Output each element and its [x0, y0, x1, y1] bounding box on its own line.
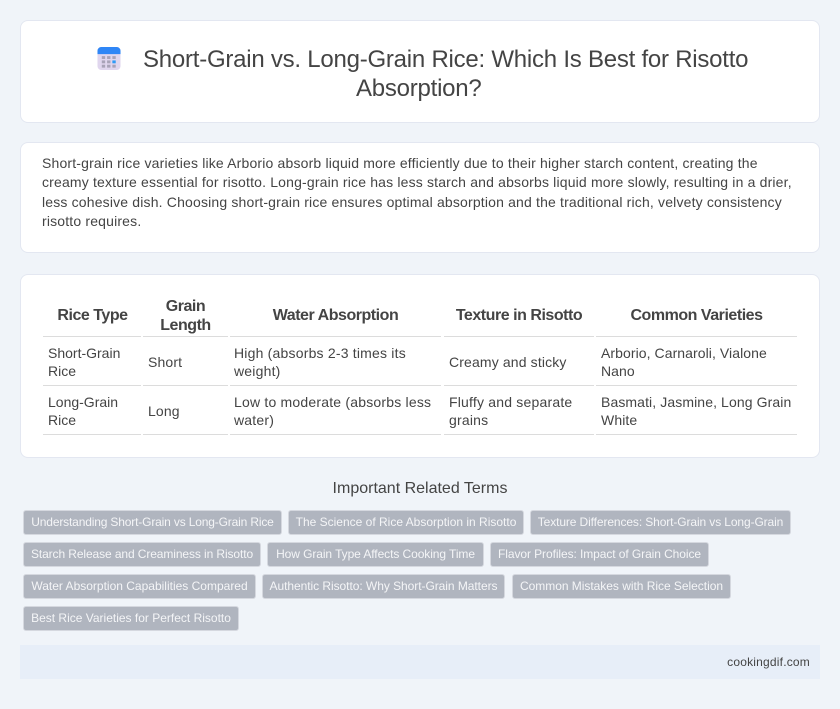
tag: Starch Release and Creaminess in Risotto [31, 547, 253, 561]
row: long-grain rice: White [601, 412, 637, 428]
tag [530, 510, 791, 535]
row: short-grain rice [48, 345, 767, 379]
row: long-grain rice: Long [148, 403, 180, 419]
related terms tags [23, 510, 791, 631]
tag [23, 606, 239, 631]
tag: Flavor Profiles: Impact of Grain Choice [498, 547, 701, 561]
table header: rice type: Rice Type [57, 307, 128, 324]
table header: common varieties: Common Varieties [630, 307, 763, 324]
tag: Texture Differences: Short-Grain vs Long-Grain [538, 515, 783, 529]
footer bar [20, 645, 820, 679]
intro text: risotto requires. [42, 213, 141, 229]
tag [490, 542, 709, 567]
row: short-grain rice: Arborio, Carnaroli, Vialone [601, 345, 767, 361]
tag [23, 510, 282, 535]
tag: Common Mistakes with Rice Selection [520, 579, 723, 593]
row: long-grain rice: water) [234, 412, 274, 428]
tag: Authentic Risotto: Why Short-Grain Matters [270, 579, 497, 593]
row: short-grain rice: Short [148, 354, 182, 370]
tag: Understanding Short-Grain vs Long-Grain Rice [31, 515, 274, 529]
row: long-grain rice: Low to moderate (absorbs less [234, 394, 431, 410]
header panel [20, 20, 820, 123]
table header: grain length: Grain [166, 298, 205, 315]
title: Short-Grain vs. Long-Grain Rice: Which Is Best for Risotto [143, 46, 748, 73]
row: short-grain rice: Rice [48, 363, 76, 379]
row: short-grain rice: weight) [234, 363, 281, 379]
row: long-grain rice: Fluffy and separate [449, 394, 572, 410]
tag: Best Rice Varieties for Perfect Risotto [31, 611, 231, 625]
intro text: creamy texture essential for risotto. Long-grain rice has less starch and absorbs liquid more slowly, resulting in a drier, [42, 174, 792, 190]
title: Absorption? [356, 75, 482, 102]
tag [262, 574, 505, 599]
title [143, 46, 748, 102]
intro text: Short-grain rice varieties like Arborio absorb liquid more efficiently due to their higher starch content, creating the [42, 155, 758, 171]
tag: The Science of Rice Absorption in Risotto [296, 515, 516, 529]
tag: Water Absorption Capabilities Compared [31, 579, 248, 593]
tag: How Grain Type Affects Cooking Time [276, 547, 475, 561]
tag [23, 542, 261, 567]
comparison table panel [20, 274, 820, 458]
related terms heading: Important Related Terms [333, 480, 507, 497]
intro text [42, 155, 792, 229]
row: short-grain rice: Short-Grain [48, 345, 120, 361]
row: short-grain rice: High (absorbs 2-3 times its [234, 345, 406, 361]
tag [512, 574, 731, 599]
row: long-grain rice: grains [449, 412, 488, 428]
table header: texture in risotto: Texture in Risotto [456, 307, 582, 324]
row: long-grain rice: Rice [48, 412, 76, 428]
row: long-grain rice: Long-Grain [48, 394, 118, 410]
tag [288, 510, 524, 535]
intro text: less cohesive dish. Choosing short-grain rice ensures optimal absorption and the traditional rich, velvety consistency [42, 194, 782, 210]
row: long-grain rice [48, 394, 791, 428]
icon: calendar [97, 47, 121, 70]
table header: grain length: Length [160, 316, 211, 334]
source credit: cookingdif.com [727, 655, 810, 669]
row: short-grain rice: Creamy and sticky [449, 354, 567, 370]
tag [267, 542, 484, 567]
intro panel [20, 142, 820, 253]
table header: grain length [160, 298, 211, 334]
row: long-grain rice: Basmati, Jasmine, Long Grain [601, 394, 791, 410]
row rules [43, 336, 797, 435]
row: short-grain rice: Nano [601, 363, 635, 379]
tag [23, 574, 256, 599]
table header: water absorption: Water Absorption [273, 307, 398, 324]
